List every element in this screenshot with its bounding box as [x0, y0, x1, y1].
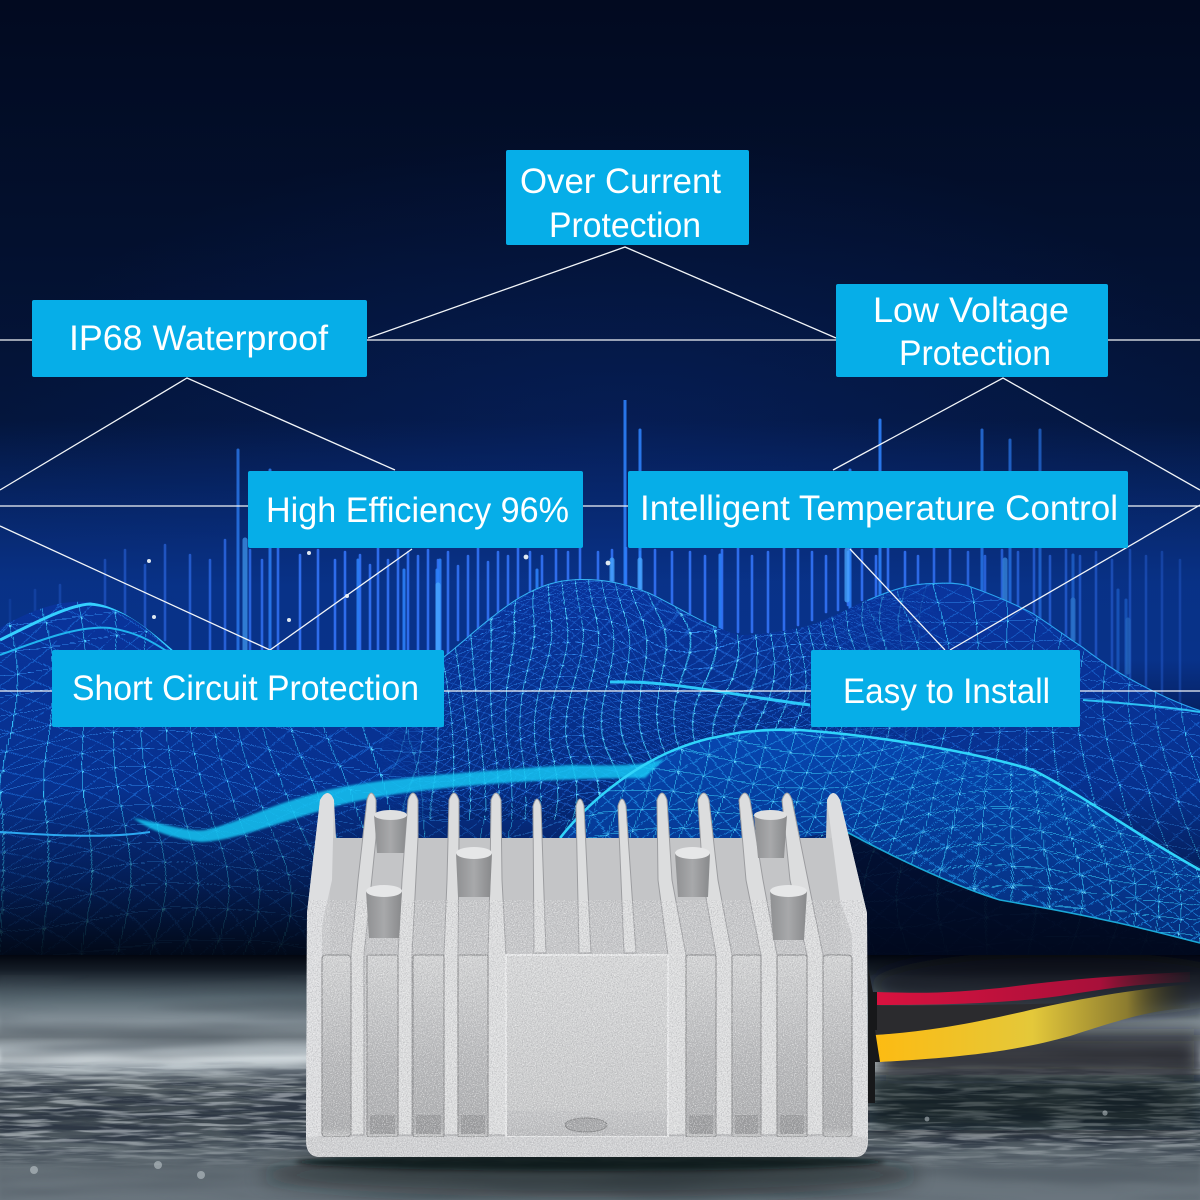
- device shadow: [295, 1153, 885, 1171]
- label: Intelligent Temperature Control: [628, 471, 1128, 548]
- label: IP68 Waterproof: [32, 300, 367, 377]
- background: misty textured floor: [0, 951, 1200, 1200]
- background: glowing data wave mesh: [0, 579, 1200, 955]
- upper surface: [330, 838, 840, 956]
- channels between fins: [322, 955, 852, 1137]
- label: Intelligent Temperature Control: Intelligent Temperature Control: [640, 489, 1118, 528]
- black wires: [875, 1002, 1110, 1035]
- label: Over Current Protection: [506, 150, 749, 245]
- background: vertical light bars: [10, 400, 1180, 710]
- mounting pegs: [366, 810, 807, 940]
- label: Low Voltage Protection: Low Voltage: [873, 291, 1069, 330]
- channel floor shade: [370, 1115, 804, 1134]
- background: bright cyan wave ribbons: [0, 700, 1200, 943]
- product: wires leaving the converter: [868, 967, 1190, 1103]
- black wire connector: [868, 967, 880, 1103]
- outer fins: [306, 793, 334, 1140]
- label: Low Voltage Protection: Protection: [899, 334, 1051, 373]
- center panel: [506, 955, 668, 1137]
- yellow wire: [875, 984, 1190, 1062]
- label: Short Circuit Protection: [52, 650, 444, 727]
- base plate: [306, 1137, 868, 1157]
- product: aluminium DC converter: [295, 793, 885, 1171]
- label: Over Current Protection: Over Current: [520, 162, 721, 201]
- background: small glowing specks: [147, 551, 610, 622]
- raised logo oval: [565, 1118, 607, 1132]
- background: bright foreground wave: [562, 731, 1200, 942]
- red wire: [877, 972, 1190, 1005]
- label: Over Current Protection: Protection: [549, 206, 701, 245]
- grain texture: [300, 900, 875, 1160]
- label: Easy to Install: Easy to Install: [843, 672, 1050, 711]
- connector lines between feature labels: [0, 247, 1200, 691]
- label: High Efficiency 96%: High Efficiency 96%: [266, 491, 569, 530]
- heat-sink fins: [351, 793, 823, 1135]
- label: Short Circuit Protection: Short Circuit Protection: [72, 669, 419, 708]
- label: IP68 Waterproof: IP68 Waterproof: [69, 319, 328, 358]
- label: Easy to Install: [811, 650, 1080, 727]
- device body: [306, 793, 868, 1157]
- label: Low Voltage Protection: [836, 284, 1108, 377]
- label: High Efficiency 96%: [248, 471, 583, 548]
